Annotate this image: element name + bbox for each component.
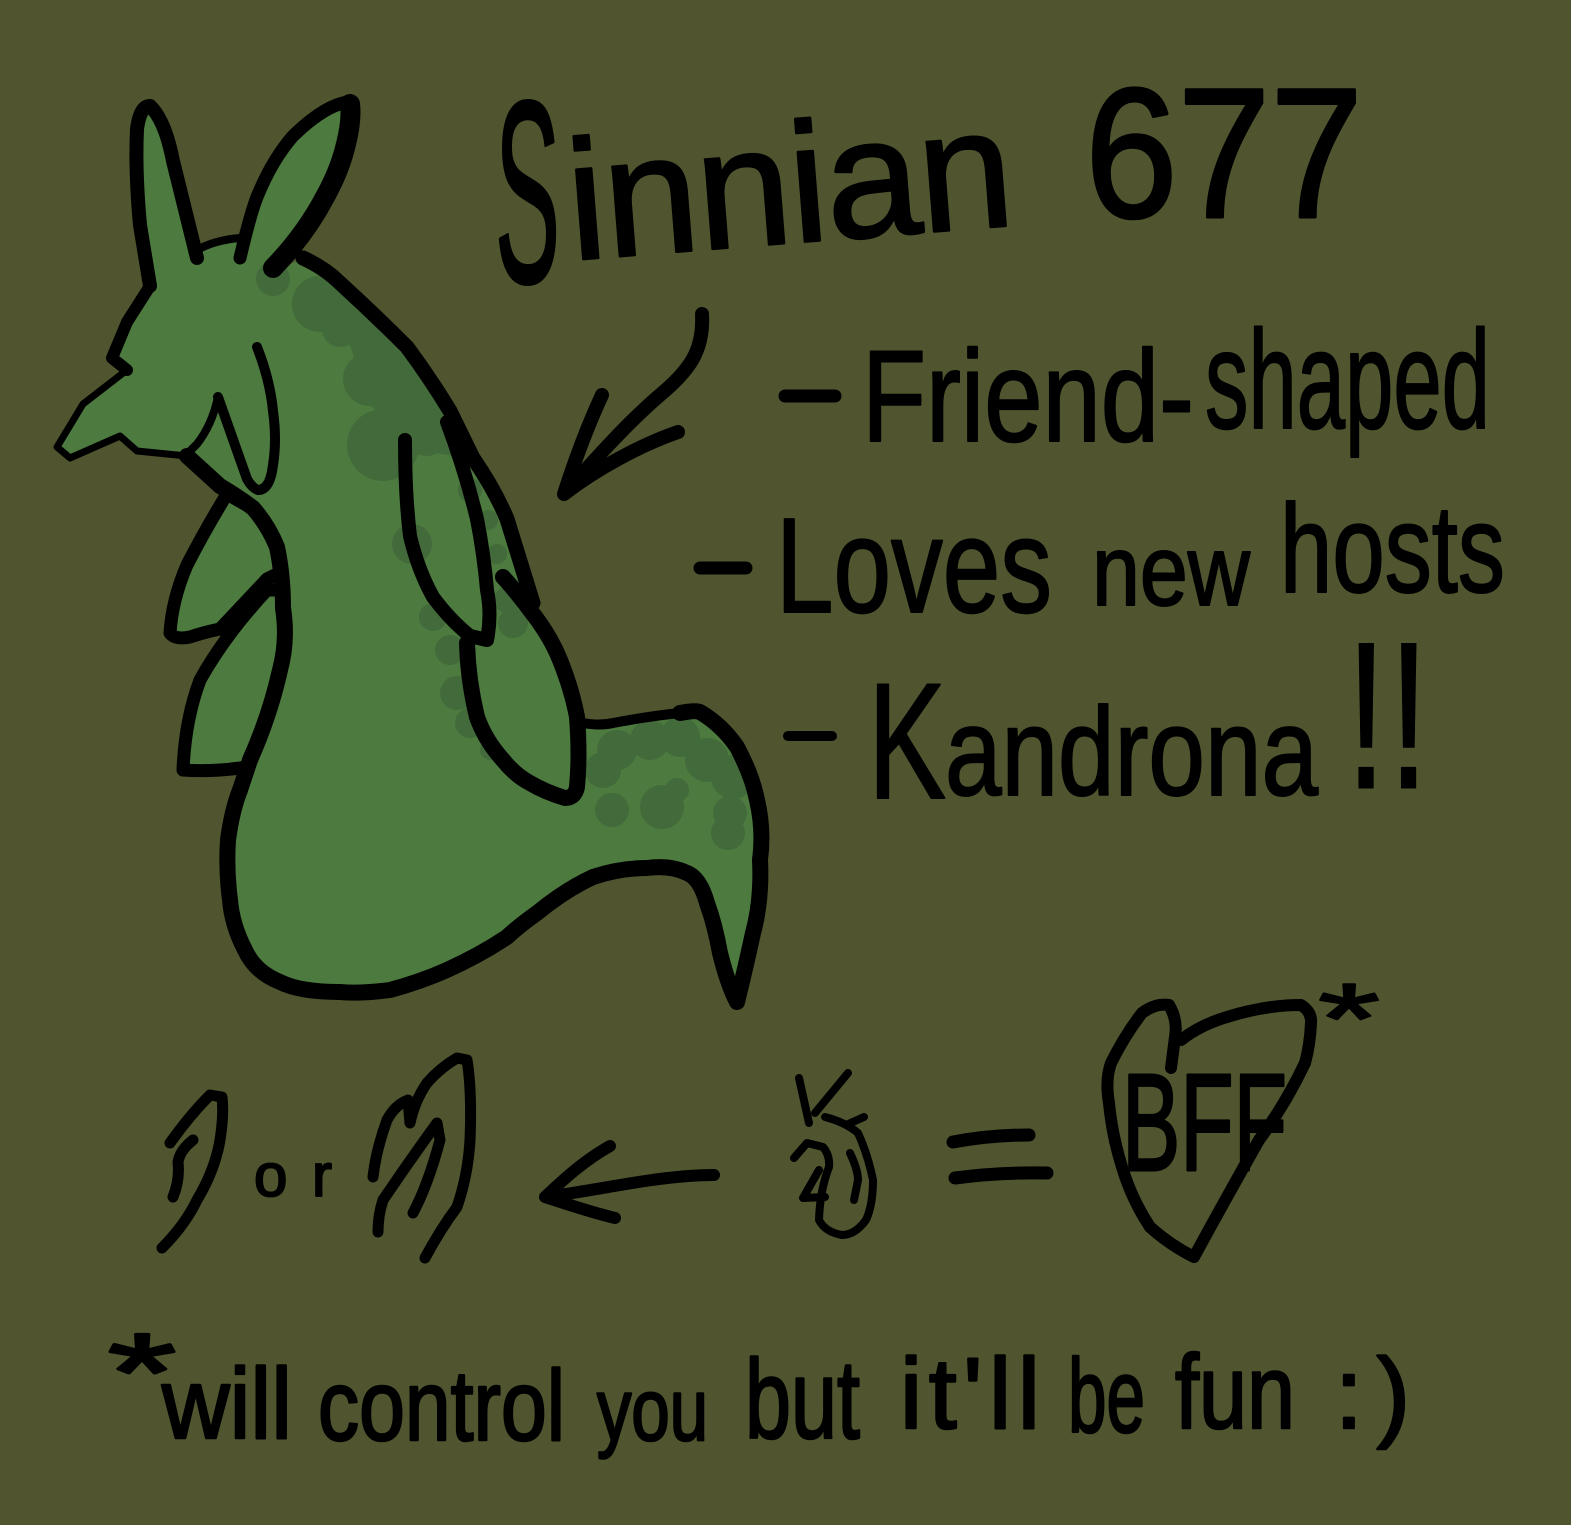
footnote text: :) — [1335, 1338, 1410, 1450]
trait: loves new hosts: new — [1092, 515, 1251, 627]
equals sign — [953, 1135, 1047, 1178]
arrow left — [545, 1146, 714, 1218]
title: S — [495, 48, 560, 338]
trait: kandrona — [788, 598, 1430, 833]
creature illustration — [57, 102, 761, 1002]
footnote text: fun — [1175, 1334, 1295, 1451]
trait: kandrona: !! — [1345, 598, 1430, 833]
trait: friend-shaped: Friend- — [862, 323, 1194, 469]
body fill — [57, 102, 761, 1002]
trait: kandrona: androna — [945, 683, 1318, 822]
BFF label: BFF — [1122, 1046, 1287, 1200]
icon: tiny sinnian — [794, 1073, 873, 1235]
footnote text: will — [161, 1348, 292, 1460]
trait: friend-shaped — [785, 301, 1490, 469]
asterisk: * — [1318, 963, 1380, 1075]
footnote text: but — [745, 1337, 860, 1462]
heart with BFF — [1107, 1005, 1311, 1257]
heart outline — [1107, 1005, 1311, 1257]
trait list — [700, 301, 1505, 833]
head and beak outline — [112, 286, 150, 370]
ear flap — [218, 347, 275, 490]
trait: loves new hosts: Loves — [776, 490, 1052, 641]
darker back spots — [256, 262, 755, 850]
back fins — [170, 494, 305, 771]
title: innian — [560, 72, 1020, 297]
chin line — [187, 397, 218, 454]
arrow pointing to creature — [564, 314, 702, 494]
lower flipper — [467, 577, 578, 798]
footnote asterisk: * — [108, 1311, 176, 1434]
footnote text: be — [1068, 1338, 1145, 1455]
icon: small ear — [162, 1095, 223, 1248]
title: 677 — [1085, 51, 1363, 257]
back outline — [303, 258, 533, 603]
trait: loves new hosts: hosts — [1280, 480, 1505, 619]
icon: double ear — [373, 1058, 471, 1258]
right ear outline — [240, 102, 348, 258]
head top line — [197, 238, 240, 250]
trait: loves new hosts — [700, 480, 1505, 641]
left ear outline — [136, 106, 197, 286]
footnote text — [161, 1334, 1410, 1462]
upper arm — [405, 422, 490, 640]
footnote text: you — [597, 1360, 708, 1459]
or label: or — [254, 1142, 332, 1209]
trait: kandrona: K — [868, 649, 946, 833]
tail and belly outline — [583, 713, 680, 724]
footnote text: it'll — [900, 1338, 1040, 1450]
footnote text: control — [318, 1350, 565, 1462]
footnote — [108, 1311, 1410, 1462]
title — [495, 48, 1363, 338]
